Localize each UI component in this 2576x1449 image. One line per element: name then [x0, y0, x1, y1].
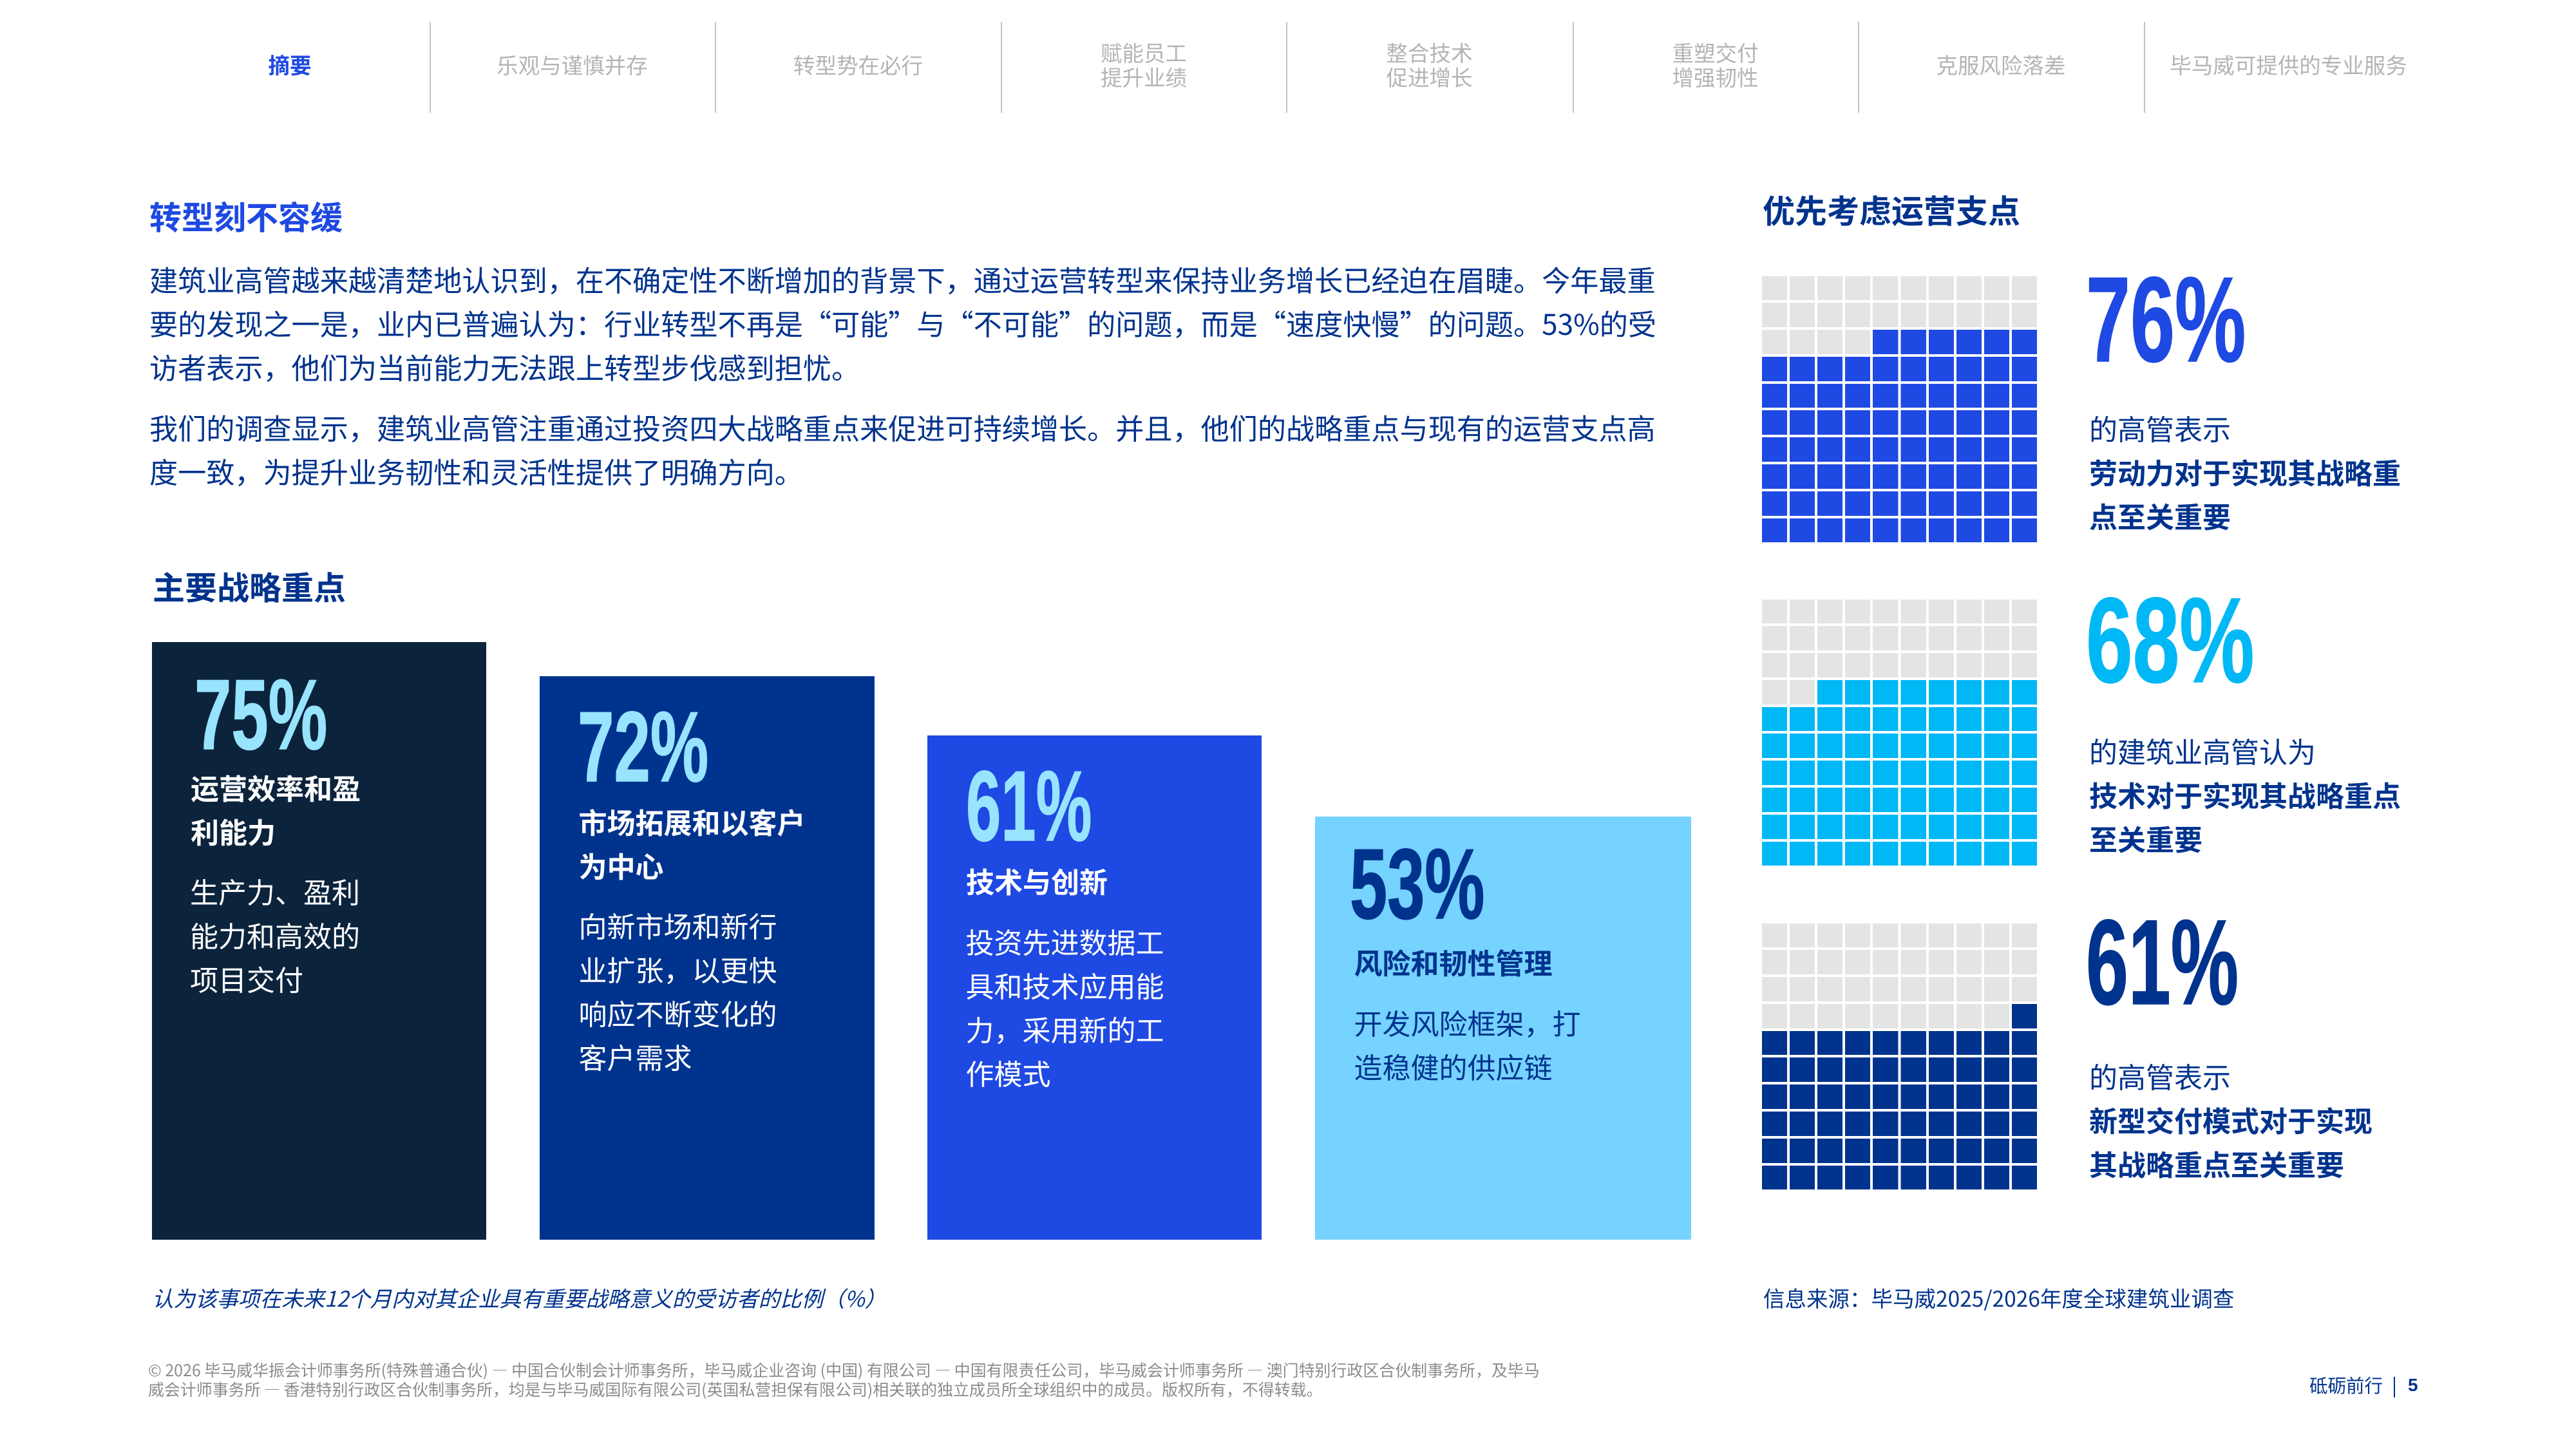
priority description: 客户需求 — [578, 1036, 692, 1077]
percentage 68%: 68% — [2086, 573, 2255, 708]
priority description: 能力和高效的 — [190, 914, 360, 955]
tab: empower employees: 提升业绩 — [1101, 61, 1187, 92]
copyright footer: © 2026 毕马威华振会计师事务所(特殊普通合伙) — 中国合伙制会计师事务所，毕马威企业咨询 (中国) 有限公司 — 中国有限责任公司，毕马威会计师事务所 — 澳门特别行政区合伙制事务所，及毕马 — [148, 1358, 1540, 1381]
priority description: 力，采用新的工 — [966, 1008, 1164, 1049]
copyright footer: 威会计师事务所 — 香港特别行政区合伙制事务所，均是与毕马威国际有限公司(英国私营担保有限公司)相关联的独立成员所全球组织中的成员。版权所有，不得转载。 — [148, 1378, 1323, 1401]
priority title: 技术与创新 — [966, 859, 1108, 900]
priority description — [578, 904, 777, 1077]
description: 其战略重点至关重要 — [2089, 1142, 2344, 1184]
priority title: 利能力 — [191, 810, 276, 851]
copyright footer — [148, 1358, 1540, 1401]
priority description: 向新市场和新行 — [578, 904, 777, 945]
percentage 75%: 75% — [194, 659, 327, 770]
tab: professional services: 毕马威可提供的专业服务 — [2170, 48, 2407, 80]
tab: reshape delivery: 增强韧性 — [1672, 61, 1758, 92]
percentage 61%: 61% — [2086, 895, 2239, 1030]
waffle chart 76 of 100 — [1762, 276, 2037, 542]
intro paragraph 2: 度一致，为提升业务韧性和灵活性提供了明确方向。 — [149, 450, 803, 491]
percentage 53%: 53% — [1350, 828, 1484, 940]
bar panel: 61% technology and innovation — [927, 735, 1262, 1240]
priority description: 开发风险框架，打 — [1354, 1001, 1580, 1042]
tab: reshape delivery — [1573, 22, 1858, 113]
description: 的建筑业高管认为 — [2089, 729, 2316, 770]
navigation tabs — [268, 22, 2407, 113]
description — [2089, 407, 2401, 536]
tab: integrate technology — [1286, 22, 1573, 113]
description: 点至关重要 — [2089, 495, 2231, 536]
page footer: section name and page number — [2309, 1372, 2418, 1398]
priority description — [1354, 1001, 1580, 1086]
priority description: 响应不断变化的 — [578, 992, 777, 1033]
tab: transformation imperative — [715, 22, 1001, 113]
priority description: 业扩张，以更快 — [578, 948, 777, 989]
tab: optimism and caution: 乐观与谨慎并存 — [497, 48, 648, 80]
priority title: 风险和韧性管理 — [1354, 940, 1552, 981]
KPI: 61% delivery models — [1762, 895, 2372, 1189]
page number: 5 — [2408, 1375, 2418, 1395]
intro paragraph 2 — [149, 406, 1656, 491]
description: 劳动力对于实现其战略重 — [2089, 451, 2401, 492]
percentage 61%: 61% — [966, 750, 1092, 862]
KPI: 76% workforce — [1762, 252, 2401, 542]
description: 的高管表示 — [2089, 407, 2231, 448]
intro paragraph 1 — [149, 258, 1656, 386]
section name: 砥砺前行 — [2309, 1372, 2383, 1398]
tab: empower employees: 赋能员工 — [1101, 36, 1187, 68]
operational levers heading: 优先考虑运营支点 — [1763, 186, 2020, 232]
intro paragraph 1: 要的发现之一是，业内已普遍认为：行业转型不再是“可能”与“不可能”的问题，而是“速度快慢”的问题。53%的受 — [149, 301, 1656, 343]
tab: integrate technology: 促进增长 — [1386, 61, 1472, 92]
priority title: 市场拓展和以客户 — [578, 800, 805, 841]
description: 技术对于实现其战略重点 — [2089, 773, 2401, 814]
tab: optimism and caution — [430, 22, 715, 113]
priority description: 作模式 — [966, 1052, 1051, 1093]
description: 至关重要 — [2089, 817, 2202, 858]
priority description — [966, 920, 1164, 1093]
tab: transformation imperative: 转型势在必行 — [793, 48, 923, 80]
tab: active summary: 摘要 — [268, 48, 312, 80]
percentage 72%: 72% — [578, 691, 708, 802]
priority description — [190, 870, 360, 999]
bar panel: 72% market expansion — [540, 676, 875, 1240]
tab: integrate technology: 整合技术 — [1386, 36, 1472, 68]
priority title — [578, 800, 805, 885]
chart caption: 认为该事项在未来12个月内对其企业具有重要战略意义的受访者的比例（%） — [152, 1282, 886, 1313]
tab: professional services — [2144, 22, 2433, 113]
intro paragraph 2: 我们的调查显示，建筑业高管注重通过投资四大战略重点来促进可持续增长。并且，他们的战略重点与现有的运营支点高 — [149, 406, 1656, 447]
bar panel: 75% operational efficiency — [152, 642, 486, 1240]
main heading: 转型刻不容缓 — [149, 193, 343, 239]
source note: 信息来源：毕马威2025/2026年度全球建筑业调查 — [1763, 1282, 2234, 1313]
priority description: 造稳健的供应链 — [1354, 1045, 1552, 1086]
KPI: 68% technology — [1762, 573, 2401, 866]
percentage 76%: 76% — [2086, 252, 2246, 387]
tab: empower employees — [1001, 22, 1287, 113]
intro paragraph 1: 建筑业高管越来越清楚地认识到，在不确定性不断增加的背景下，通过运营转型来保持业务增长已经迫在眉睫。今年最重 — [149, 258, 1656, 299]
description: 的高管表示 — [2089, 1055, 2231, 1096]
strategic priorities heading: 主要战略重点 — [153, 563, 346, 609]
description — [2089, 1055, 2372, 1184]
priority description: 项目交付 — [190, 958, 303, 999]
waffle chart 61 of 100 — [1762, 923, 2037, 1189]
description — [2089, 729, 2401, 858]
tab: overcome risk gaps — [1858, 22, 2144, 113]
priority title: 为中心 — [578, 844, 663, 885]
bar panel: 53% risk and resilience — [1315, 817, 1691, 1240]
priority description: 投资先进数据工 — [966, 920, 1164, 961]
intro paragraph 1: 访者表示，他们为当前能力无法跟上转型步伐感到担忧。 — [149, 345, 860, 386]
priority description: 生产力、盈利 — [190, 870, 360, 911]
tab: overcome risk gaps: 克服风险落差 — [1936, 48, 2066, 80]
tab: reshape delivery: 重塑交付 — [1672, 36, 1758, 68]
waffle chart 68 of 100 — [1762, 600, 2037, 866]
priority title — [191, 766, 361, 851]
priority title: 运营效率和盈 — [191, 766, 361, 808]
description: 新型交付模式对于实现 — [2089, 1099, 2372, 1140]
priority description: 具和技术应用能 — [966, 964, 1164, 1005]
